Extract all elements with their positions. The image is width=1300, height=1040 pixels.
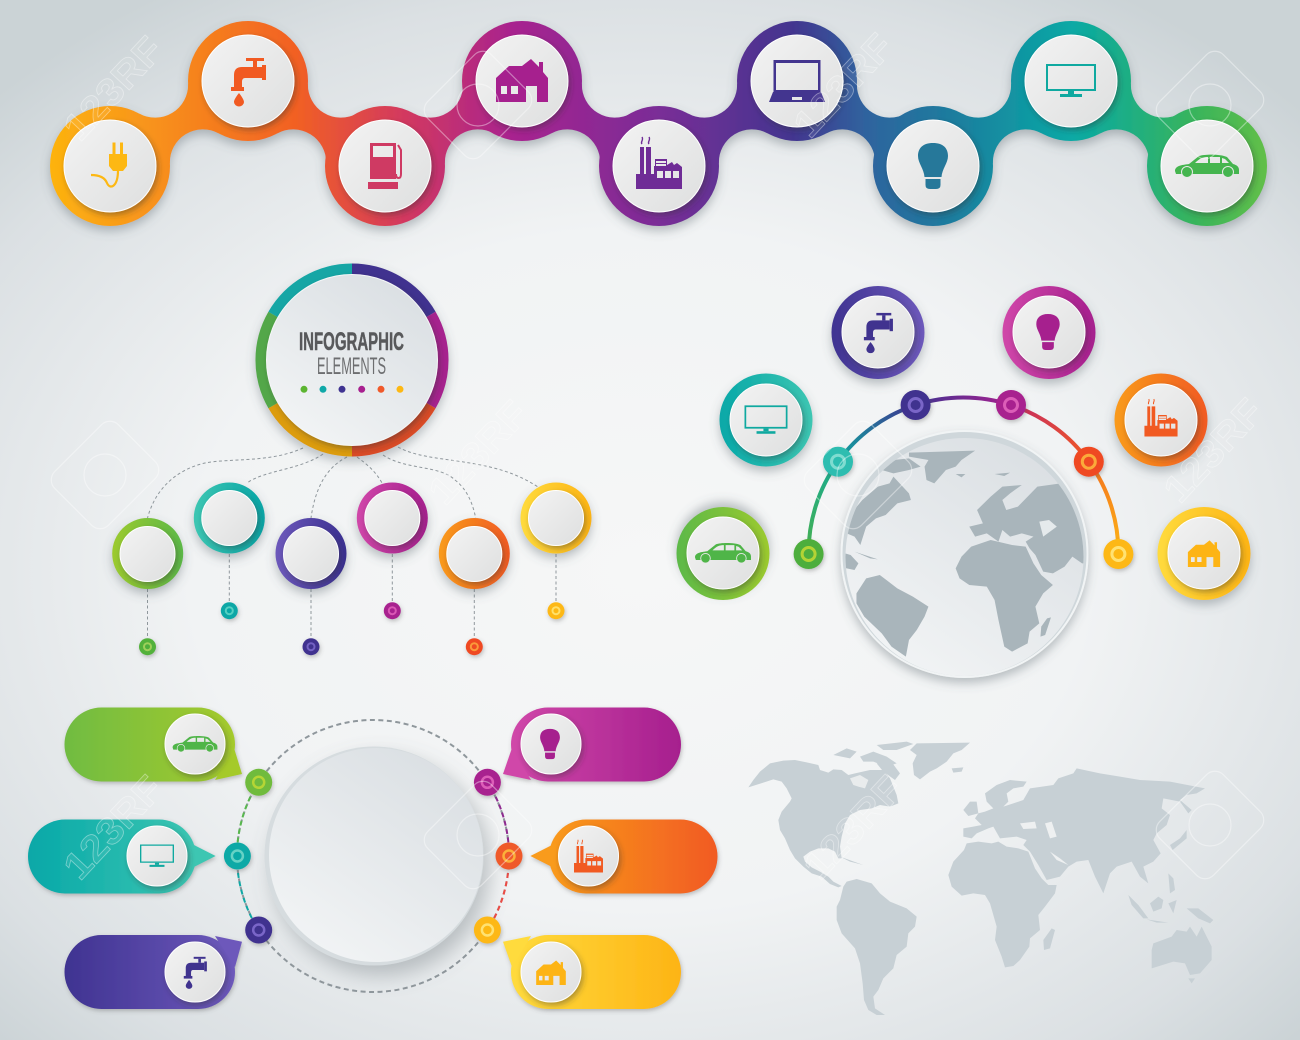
central disc — [266, 274, 438, 446]
central title circle — [261, 269, 443, 450]
icon: car — [1161, 120, 1253, 212]
pill: faucet — [64, 935, 242, 1009]
node: green — [112, 518, 183, 655]
arc segments — [809, 397, 1118, 554]
node: indigo — [276, 518, 346, 655]
watermark: 123RF marks: 123RF — [786, 26, 902, 146]
arc nodes — [794, 390, 1133, 569]
panel: globe with arc of icons — [676, 286, 1250, 678]
icon: television — [1025, 35, 1117, 127]
icon: house — [476, 35, 568, 127]
node: orange — [439, 518, 510, 655]
pill: light bulb — [503, 708, 681, 782]
pill: car — [64, 708, 242, 782]
icon ring: car — [676, 507, 770, 600]
watermark: 123RF marks — [56, 26, 1272, 888]
panel: circular diagram with speech-bubble pills — [28, 708, 718, 1009]
pill: factory — [530, 820, 718, 894]
node: yellow — [520, 482, 592, 619]
pill: television — [28, 820, 216, 894]
panel: hierarchy diagram — [112, 269, 591, 655]
icon: light bulb — [887, 120, 979, 212]
globe — [831, 430, 1100, 678]
central disc — [264, 746, 484, 966]
subtitle: ELEMENTS — [317, 353, 386, 380]
title: INFOGRAPHIC — [299, 328, 404, 356]
dashed connector lines — [148, 447, 556, 640]
panel: top chain of connected circles — [50, 21, 1267, 226]
globe continents — [846, 450, 1084, 656]
icon ring: faucet — [832, 286, 924, 379]
icon ring: factory — [1114, 374, 1208, 466]
icon ring: light bulb — [1002, 286, 1096, 379]
ring nodes — [224, 769, 522, 944]
watermark: camera outlines — [46, 46, 1269, 894]
icon: fuel pump — [339, 120, 431, 212]
icon: laptop — [751, 35, 843, 127]
icon ring: television — [720, 374, 812, 466]
node: teal — [194, 482, 265, 619]
node: magenta — [357, 482, 428, 619]
icon ring: house — [1158, 507, 1250, 600]
watermark: 123RF marks: 123RF — [1156, 391, 1272, 511]
watermark: 123RF marks: 123RF — [56, 768, 172, 888]
chain band — [50, 21, 1267, 226]
chart: world map — [748, 742, 1213, 1015]
icon: plug — [64, 120, 156, 212]
segmented ring — [261, 269, 443, 450]
watermark: 123RF marks: 123RF — [56, 29, 172, 149]
dashed ring — [237, 720, 509, 992]
watermark: 123RF marks: 123RF — [796, 768, 912, 888]
icon: factory — [613, 120, 705, 212]
colour dots — [300, 386, 404, 393]
watermark: 123RF marks: 123RF — [421, 393, 537, 513]
pill: house — [503, 935, 681, 1009]
icon: faucet — [202, 35, 294, 127]
